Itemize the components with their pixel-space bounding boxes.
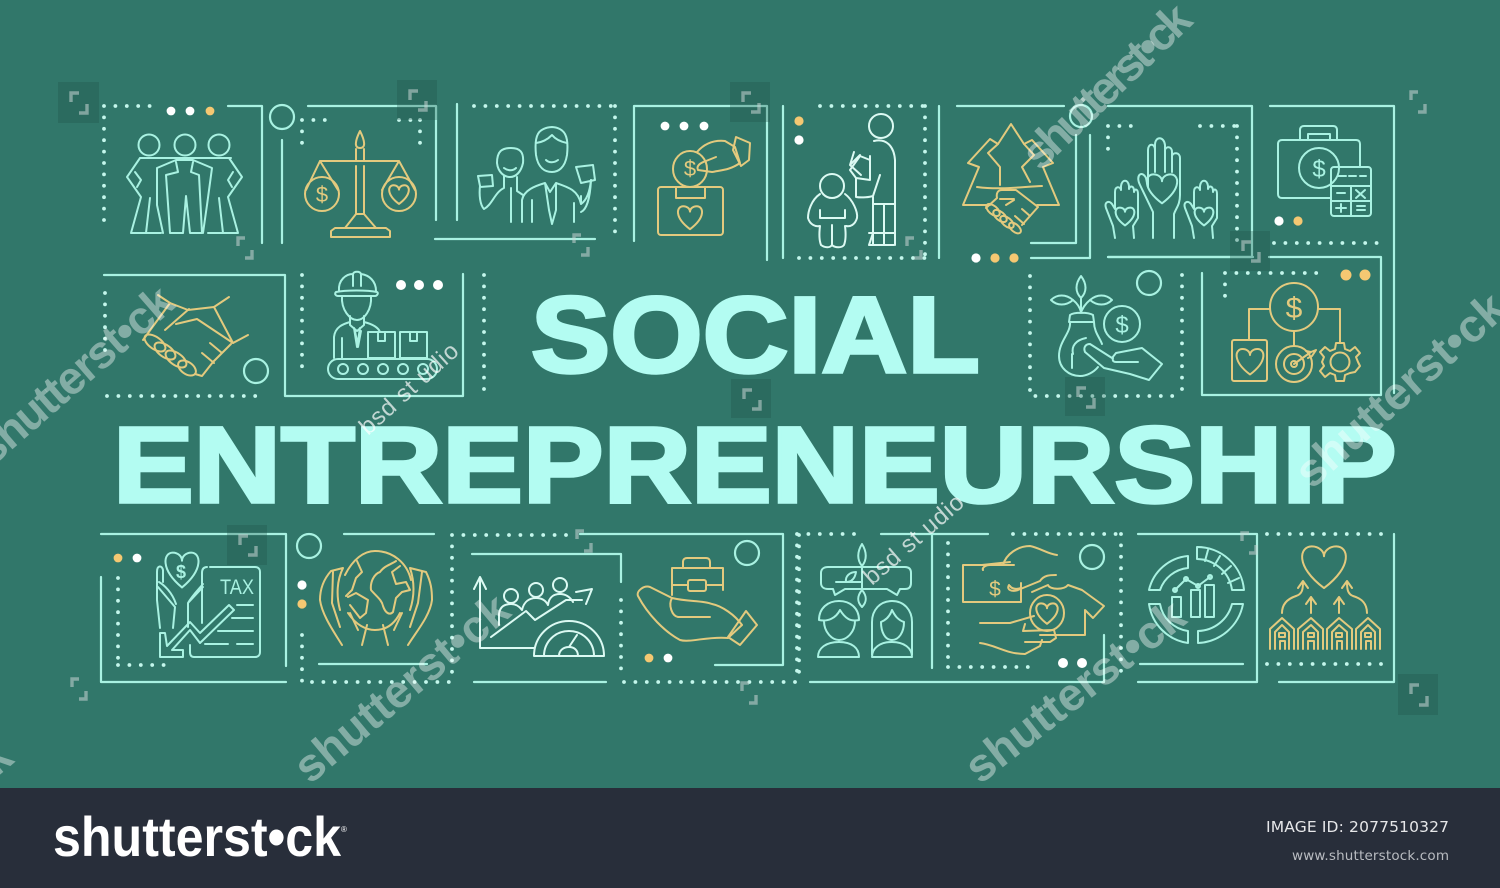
icon: growth chart with people and gauge [474, 577, 604, 656]
registered mark: ® [341, 825, 347, 834]
panel: balance scale [270, 105, 436, 243]
panel: donation box [634, 106, 767, 260]
footer bar [0, 788, 1500, 888]
icon: tax document with heart and hands: $ [176, 562, 186, 582]
icon: seedling light bulb and hand [1051, 276, 1162, 380]
title: SOCIAL [531, 275, 980, 396]
icon: dollar flow to heart, target and gear [1232, 283, 1360, 382]
panel: bulb plant with hand and coin [1030, 271, 1182, 396]
panel: housing handshake [957, 105, 1092, 263]
icon: gold handshake [142, 295, 248, 379]
icon: hands exchanging money for t-shirt [963, 546, 1104, 654]
icon: standing man with clipboard and seated person [808, 114, 895, 247]
icon: hands exchanging money for t-shirt: $ [989, 578, 1001, 601]
watermark: shutterstock text: shutterst•ck [283, 582, 520, 793]
title: ENTREPRENEURSHIP [113, 405, 1397, 526]
watermark: bsd studio text: bsd st udio [354, 337, 464, 440]
panel: globe in hands [297, 534, 452, 682]
panel: community dialogue [797, 534, 1104, 682]
icon: hand dropping coin into box: $ [684, 156, 696, 181]
watermark: shutterstock text: shutterst•ck [954, 589, 1195, 793]
icon: worker and conveyor [328, 272, 437, 379]
panel: tax benefits [101, 534, 286, 682]
icon: two businessmen with raised fists [478, 127, 595, 224]
panel: consultant and seated person [783, 106, 939, 258]
panel: analytics donut [1138, 534, 1257, 682]
icon: houses with handshake [963, 124, 1059, 235]
icon: tax document with heart and hands [157, 553, 260, 657]
icon: earth held by hands [320, 551, 432, 645]
icon: briefcase with dollar and calculator: $ [1312, 156, 1326, 183]
icon: scale with money and heart: $ [316, 182, 328, 207]
icon: tax document with heart and hands: TAX [220, 576, 254, 599]
panel: factory worker [302, 272, 484, 392]
panel: fair trade purchase [948, 534, 1122, 682]
panel: briefcase in hand [580, 534, 799, 682]
icon: scale with money and heart [305, 131, 416, 237]
title [113, 275, 1397, 526]
icon: two people with speech bubble and plant [818, 544, 912, 657]
watermark: bsd studio text [354, 337, 970, 591]
icon: dollar flow to heart, target and gear: $ [1286, 292, 1303, 325]
watermark: bsd studio text: bsd st udio [858, 489, 970, 591]
icon: seedling light bulb and hand: $ [1115, 312, 1129, 339]
icon: hand dropping coin into box [658, 137, 750, 235]
icon: three people [127, 134, 242, 233]
panel: briefcase and calculator [1270, 106, 1394, 393]
panel: two businessmen [435, 104, 615, 239]
panel: team of three people [104, 106, 262, 243]
panel: handshake [104, 274, 463, 396]
icon: heart with arrows rising from houses [1270, 546, 1380, 649]
panel: community heart and homes [1267, 534, 1394, 682]
image id: IMAGE ID: 2077510327 [1266, 818, 1449, 836]
panel: social business flow [1108, 257, 1381, 395]
watermark: logo tiles [58, 80, 1438, 715]
icon: hand holding briefcase [638, 558, 757, 645]
website: www.shutterstock.com [1292, 848, 1449, 864]
icon: donut chart with bars [1149, 547, 1244, 643]
footer logo: shutterst•ck [53, 805, 342, 868]
panel: team growth chart [452, 535, 800, 682]
icon: three raised hands [1106, 138, 1217, 238]
panel: raised hands with hearts [1106, 106, 1252, 257]
icon: briefcase with dollar and calculator [1278, 126, 1371, 216]
